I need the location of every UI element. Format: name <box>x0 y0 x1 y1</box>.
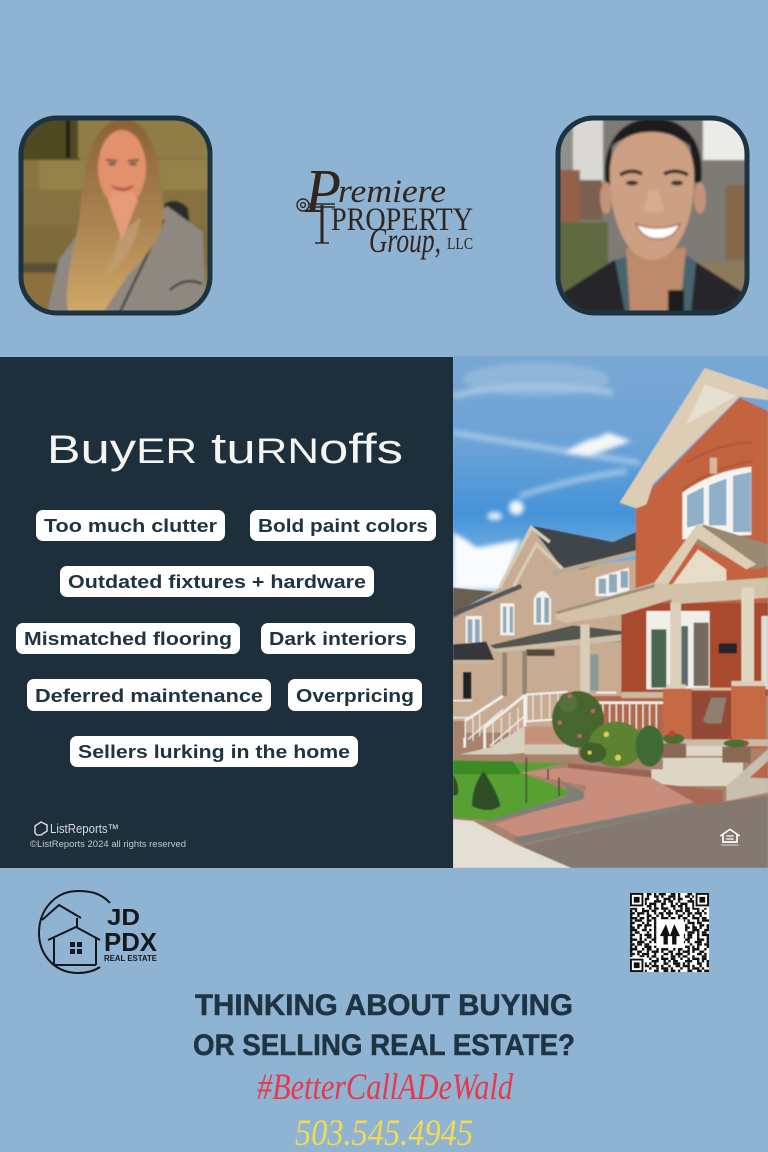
logo: Premiere Property Group: PROPERTY <box>331 202 473 238</box>
paved path <box>495 768 695 839</box>
logo: Premiere Property Group: P <box>304 158 341 226</box>
wall behind porch rail <box>593 696 665 746</box>
curb <box>453 819 571 868</box>
tag: mismatched flooring: Mismatched flooring <box>24 628 232 649</box>
photo: brick houses <box>453 356 768 868</box>
porch window <box>646 611 710 689</box>
logo: Premiere Property Group <box>297 158 473 260</box>
tag: overpricing: Overpricing <box>296 685 414 706</box>
tag: dark interiors: Dark interiors <box>269 628 407 649</box>
railings <box>453 692 616 751</box>
flower planters <box>662 730 751 763</box>
tag: outdated fixtures <box>60 566 374 597</box>
porch gable <box>693 524 768 569</box>
front steps <box>651 746 743 786</box>
icon: key <box>297 199 335 243</box>
bushes <box>552 691 664 767</box>
brick pillars <box>663 689 692 744</box>
arched window <box>682 467 751 539</box>
tag: bold paint colors: Bold paint colors <box>258 515 428 536</box>
portrait: man <box>555 115 750 315</box>
logo: Premiere Property Group: LLC <box>447 234 473 253</box>
columns <box>670 603 681 688</box>
small tree <box>472 771 500 810</box>
logo: JD PDX real estate: REAL ESTATE <box>104 954 158 963</box>
tag: too much clutter <box>36 510 225 541</box>
headline: OR SELLING REAL ESTATE? <box>193 1029 575 1062</box>
icon: house in circle <box>39 891 110 973</box>
tag: sellers lurking <box>70 736 358 767</box>
white porch rail <box>593 701 663 736</box>
tag: deferred maintenance <box>27 679 271 711</box>
main brick house wall <box>636 398 768 603</box>
address plate <box>719 643 737 653</box>
beige porch <box>453 642 495 661</box>
beige house <box>453 528 636 733</box>
logo: JD PDX real estate: PDX <box>104 927 158 957</box>
lawn <box>453 759 573 821</box>
lamp posts <box>526 758 559 803</box>
sky <box>453 356 768 609</box>
copyright: ©ListReports 2024 all rights reserved <box>30 839 186 850</box>
tag: mismatched flooring <box>16 623 240 654</box>
porch brick <box>621 603 768 696</box>
icon: listreports <box>35 822 47 835</box>
gable trim <box>620 368 768 508</box>
portrait border <box>21 118 210 313</box>
headline <box>193 989 575 1062</box>
portrait: woman <box>18 115 213 315</box>
logo: Premiere Property Group: Group, <box>369 221 441 260</box>
beige windows <box>466 568 629 645</box>
porch door <box>761 616 768 689</box>
tag: outdated fixtures: Outdated fixtures + hardware <box>68 571 366 592</box>
logo: JD PDX real estate <box>39 891 158 973</box>
portrait border <box>558 118 747 313</box>
heading: Buy ER tuRN offs <box>47 424 403 473</box>
driveway <box>521 796 768 868</box>
tag: dark interiors <box>261 623 415 654</box>
window icon <box>70 942 82 954</box>
base ground <box>453 589 768 868</box>
panel: buyer turnoffs <box>0 357 453 868</box>
QR code <box>630 893 709 972</box>
icon: equal housing <box>720 829 740 845</box>
headline: THINKING ABOUT BUYING <box>195 989 573 1022</box>
tag: deferred maintenance: Deferred maintenance <box>35 685 263 706</box>
tag: overpricing <box>288 679 422 711</box>
tag: too much clutter: Too much clutter <box>44 515 217 536</box>
listreports brand: ListReports™ <box>50 822 119 836</box>
logo: Premiere Property Group: remiere <box>338 174 446 210</box>
hashtag: #BetterCallADeWald <box>257 1067 513 1108</box>
tag: bold paint colors <box>250 510 436 541</box>
far house roof <box>453 588 495 613</box>
tag: sellers lurking: Sellers lurking in the home <box>78 741 350 762</box>
porch chair <box>703 698 726 724</box>
porch roof <box>555 578 768 623</box>
logo: JD PDX real estate: JD <box>107 904 140 930</box>
